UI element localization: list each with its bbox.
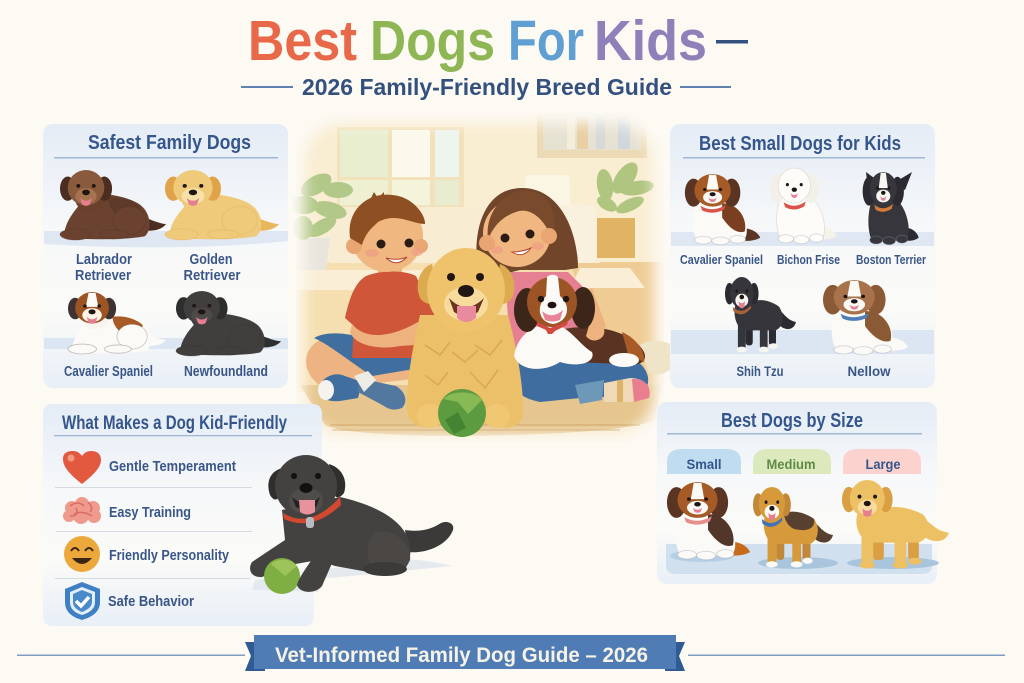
- label: golden: Retriever: [184, 268, 241, 284]
- labels row 2: Shih Tzu: [736, 363, 784, 379]
- green ball: [264, 558, 300, 594]
- labels row 1: Boston Terrier: [856, 253, 926, 267]
- labels row 1: [680, 253, 926, 267]
- dog: shih tzu: [725, 277, 796, 352]
- icon: heart: [63, 451, 101, 484]
- title: Kids: [594, 9, 707, 73]
- heading: What Makes a Dog Kid-Friendly: [62, 413, 287, 434]
- title: [248, 9, 748, 73]
- illustration: family with dogs: [290, 112, 680, 442]
- heading: Best Small Dogs for Kids: [699, 133, 901, 155]
- dog: cavalier: [685, 174, 760, 245]
- boy: [306, 192, 438, 410]
- text: easy training: Easy Training: [109, 504, 191, 521]
- labels row 1: Cavalier Spaniel: [680, 253, 763, 267]
- text: gentle temperament: Gentle Temperament: [109, 458, 236, 475]
- cavalier puppy: [514, 275, 680, 374]
- dog: black dog with ball: [250, 455, 453, 594]
- tab: large: Large: [866, 456, 901, 472]
- panel: best dogs by size: [657, 402, 949, 584]
- tab: medium: Medium: [766, 456, 816, 472]
- rug: [300, 385, 662, 436]
- dog: small: [667, 482, 750, 560]
- floor bands: [44, 231, 288, 247]
- label: labrador: Retriever: [75, 268, 131, 284]
- dog: medium: [753, 487, 833, 567]
- labels row 1: Bichon Frise: [777, 253, 840, 267]
- floor band: [666, 544, 932, 574]
- floor bands: [671, 232, 934, 246]
- panel: best small dogs: Nellow: [848, 363, 891, 379]
- panel: what makes a dog kid-friendly: [43, 404, 322, 626]
- title: Best: [248, 9, 357, 73]
- footer ribbon: Vet-Informed Family Dog Guide – 2026: [275, 643, 648, 667]
- dog: large: [842, 480, 949, 568]
- tab: small: [667, 449, 741, 474]
- title: Dogs: [370, 9, 495, 73]
- subtitle: 2026 Family-Friendly Breed Guide: [302, 74, 672, 100]
- dog: cavalier spaniel: [68, 292, 166, 354]
- dog: bichon: [770, 168, 836, 244]
- dog: nellow: [823, 280, 908, 355]
- icon: shield: [65, 582, 100, 620]
- dog: newfoundland: [176, 291, 281, 356]
- footer ribbon: [17, 635, 1005, 671]
- label: cavalier: Cavalier Spaniel: [64, 364, 153, 380]
- room background: [290, 112, 664, 442]
- girl: [476, 188, 650, 404]
- green ball: [438, 389, 486, 437]
- icon: smile: [64, 536, 100, 572]
- label: labrador: Labrador: [76, 252, 132, 268]
- tab: large: [843, 449, 921, 474]
- text: safe behavior: Safe Behavior: [108, 593, 194, 610]
- dog: golden retriever: [165, 170, 279, 240]
- plants: [297, 238, 330, 270]
- text: friendly personality: Friendly Personality: [109, 547, 230, 564]
- dog: labrador: [60, 170, 166, 240]
- tab: small: Small: [686, 456, 722, 472]
- title: For: [508, 9, 584, 73]
- tab: medium: [753, 449, 831, 474]
- label: golden: Golden: [190, 252, 232, 268]
- icon: brain: [63, 497, 101, 524]
- panel: best small dogs: [670, 124, 935, 388]
- heading: Best Dogs by Size: [721, 410, 863, 432]
- panel: safest family dogs: [43, 124, 288, 388]
- dog: boston terrier: [863, 172, 919, 245]
- label: newfoundland: Newfoundland: [184, 364, 268, 380]
- golden retriever: [407, 248, 523, 428]
- heading: Safest Family Dogs: [88, 132, 251, 154]
